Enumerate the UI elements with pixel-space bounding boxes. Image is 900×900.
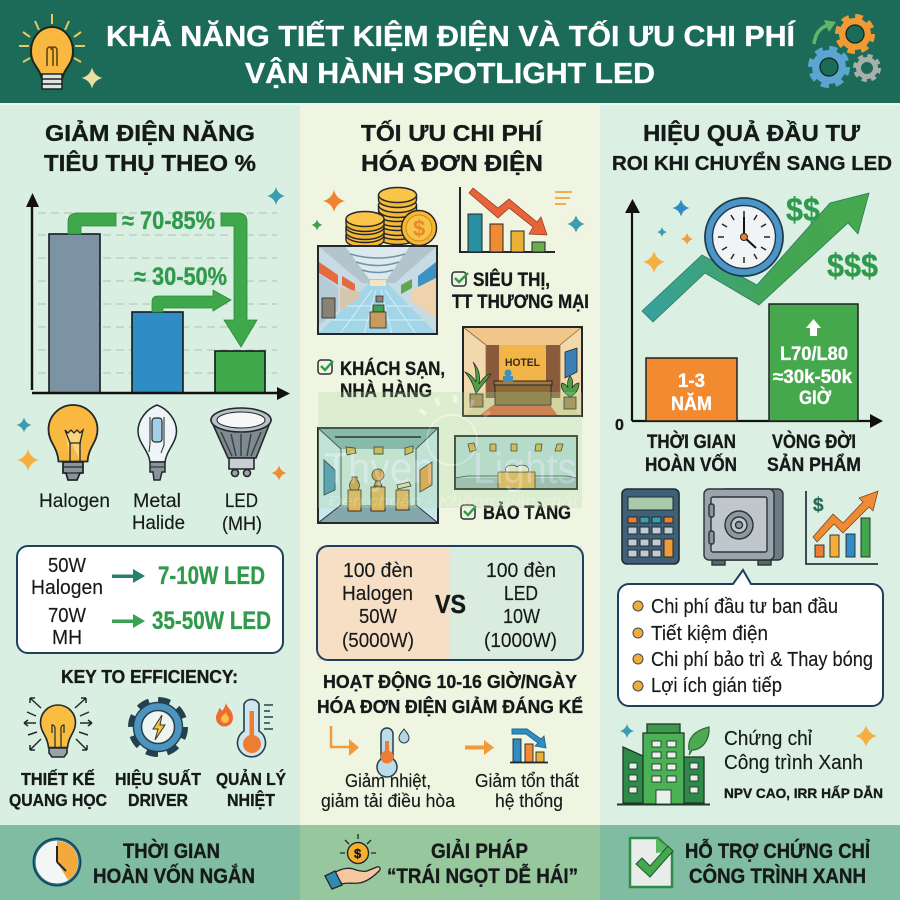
panel: column 3 return on investment — [600, 104, 900, 825]
values: LED wattage — [152, 562, 271, 635]
header banner — [0, 0, 900, 105]
icon: coin stacks — [346, 188, 436, 248]
image: museum hall — [318, 428, 438, 523]
title — [106, 19, 796, 90]
chart: payback and lifetime — [615, 191, 883, 434]
labels: chart categories: VÒNG ĐỜI — [772, 429, 856, 453]
bar: payback: 1-3 — [678, 371, 705, 392]
title: VẬN HÀNH SPOTLIGHT LED — [245, 56, 655, 90]
labels: lamp names: LED — [225, 490, 258, 512]
icon: growth chart — [806, 491, 878, 564]
arrow: metal halide to LED saving — [152, 290, 231, 312]
icon: gears and arrow — [813, 19, 878, 83]
text: halogen group: 50W — [359, 605, 398, 628]
icon: footer clock — [34, 838, 80, 886]
heading: key to efficiency: KEY TO EFFICIENCY: — [61, 667, 238, 687]
label: supermarket: SIÊU THỊ, — [473, 267, 550, 291]
callout: cost factors list — [618, 570, 883, 706]
labels: lamp names — [39, 490, 262, 535]
list text: Chi phí bảo trì & Thay bóng — [651, 649, 873, 671]
image: shopping mall — [318, 246, 437, 334]
text: certificate support: HỖ TRỢ CHỨNG CHỈ — [685, 839, 870, 863]
icon: hand with coin — [325, 834, 380, 889]
labels: efficiency keys: QUANG HỌC — [9, 790, 107, 810]
text: indirect savings captions: giảm tải điều hòa — [321, 791, 456, 811]
labels: efficiency keys: NHIỆT — [227, 789, 275, 810]
panel: column 1 electricity reduction — [0, 104, 300, 825]
callout: wattage equivalents: Halogen — [31, 577, 103, 599]
labels: chart categories: SẢN PHẨM — [767, 453, 861, 476]
text: versus: VS — [435, 589, 466, 619]
icons: dollar signs: $$ — [786, 191, 820, 228]
labels: chart categories: THỜI GIAN — [647, 429, 736, 453]
watermark: Thyen — [324, 444, 434, 493]
icon: driver gear — [134, 702, 182, 752]
bar chart: power by lamp type — [26, 193, 290, 400]
icon: halogen bulb — [48, 405, 98, 480]
labels: efficiency keys: HIỆU SUẤT — [115, 768, 201, 789]
labels: efficiency keys: DRIVER — [128, 790, 188, 810]
label: supermarket — [452, 267, 589, 313]
icon: thermal thermometer with flame — [216, 700, 273, 757]
title: KHẢ NĂNG TIẾT KIỆM ĐIỆN VÀ TỐI ƯU CHI PHÍ — [106, 19, 796, 53]
arrow: MH to LED — [112, 614, 145, 628]
icon: metal halide bulb — [138, 405, 176, 480]
text: green certificate: Chứng chỉ — [724, 728, 813, 750]
icon: light bulb — [19, 14, 102, 89]
label: hotels and restaurants — [318, 357, 445, 402]
labels: efficiency keys — [9, 768, 286, 810]
label: museum: BẢO TÀNG — [483, 501, 571, 524]
footer: easy win — [300, 825, 600, 900]
text: indirect savings captions: hệ thống — [495, 791, 563, 811]
callout: wattage equivalents: MH — [52, 627, 82, 649]
icon: check supermarket — [452, 272, 468, 286]
watermark: Đèn chuẩn - Không gian chất — [328, 493, 579, 510]
heading: optimise bills: HÓA ĐƠN ĐIỆN — [361, 149, 543, 176]
icon: optical design bulb — [24, 698, 92, 757]
values: LED wattage: 35-50W LED — [152, 607, 271, 635]
list text: Tiết kiệm điện — [651, 623, 768, 645]
image: museum display case — [455, 436, 577, 489]
sparkles: column 3 — [620, 200, 877, 747]
icon: hand with coin: $ — [354, 846, 362, 861]
text: halogen group: (5000W) — [342, 629, 414, 652]
labels: efficiency keys: THIẾT KẾ — [21, 768, 95, 789]
text: LED group: (1000W) — [484, 629, 557, 652]
text: halogen group: Halogen — [342, 582, 413, 605]
panel: column 2 bill optimisation — [300, 104, 600, 825]
callout: wattage equivalents: 70W — [48, 605, 86, 627]
icon: coin dollar sign: $ — [413, 216, 425, 241]
text: LED group: 10W — [503, 605, 541, 628]
labels: chart categories: HOÀN VỐN — [645, 452, 737, 476]
text: operating hours note: HOẠT ĐỘNG 10-16 GIỜ/NGÀY — [323, 671, 578, 692]
text: easy win: GIẢI PHÁP — [431, 840, 528, 863]
text: short payback: HOÀN VỐN NGẮN — [93, 864, 255, 888]
text: easy win: “TRÁI NGỌT DỄ HÁI” — [387, 865, 578, 888]
text: operating hours note: HÓA ĐƠN ĐIỆN GIẢM ĐÁNG KỂ — [317, 696, 583, 717]
labels: efficiency keys: QUẢN LÝ — [216, 768, 286, 789]
sparkles: column 2 — [312, 190, 585, 233]
icons: dollar signs — [786, 191, 878, 284]
text: green certificate: Công trình Xanh — [724, 752, 863, 774]
text: indirect savings captions: Giảm nhiệt, — [345, 771, 431, 791]
list text — [651, 596, 873, 697]
heading: optimise bills: TỐI ƯU CHI PHÍ — [361, 119, 543, 146]
icon: thermometer and droplet — [377, 728, 409, 777]
icon: check museum — [461, 505, 476, 519]
bar: product lifetime: ≈30k-50k — [773, 367, 852, 388]
text: indirect savings captions: Giảm tổn thất — [475, 771, 579, 791]
icon: calculator — [622, 489, 679, 564]
label: supermarket: TT THƯƠNG MẠI — [452, 291, 589, 313]
arrow: halogen to LED — [112, 569, 145, 583]
text: green certificate: NPV CAO, IRR HẤP DẪN — [724, 785, 883, 801]
text: green certificate — [724, 728, 883, 801]
bar: product lifetime: L70/L80 — [780, 344, 848, 365]
text: LED group: 100 đèn — [486, 559, 556, 582]
icon: certificate document — [630, 838, 673, 887]
labels: lamp names: Halogen — [39, 490, 110, 512]
sparkles: column 1 top — [16, 187, 286, 480]
heading: ROI: ROI KHI CHUYỂN SANG LED — [612, 152, 892, 175]
label: axis zero: 0 — [615, 417, 624, 434]
text: short payback — [93, 839, 255, 888]
label: museum — [461, 501, 571, 524]
values: LED wattage: 7-10W LED — [158, 562, 265, 590]
icon: LED spotlight — [211, 408, 271, 476]
watermark — [318, 392, 582, 510]
arrowhead: heat reduction — [349, 739, 359, 756]
footer: payback — [0, 825, 300, 900]
bar: payback — [646, 358, 737, 421]
heading: reduce consumption: GIẢM ĐIỆN NĂNG — [45, 118, 255, 146]
text: LED group: LED — [504, 582, 538, 605]
image: hotel lobby — [463, 327, 582, 416]
icon: system loss chart — [510, 729, 548, 762]
heading: ROI — [612, 118, 892, 175]
text: certificate support: CÔNG TRÌNH XANH — [689, 864, 866, 888]
footer: green certificate support — [600, 825, 900, 900]
list text: Lợi ích gián tiếp — [651, 675, 782, 697]
heading: reduce consumption — [44, 118, 256, 176]
text: indirect savings captions — [321, 771, 579, 811]
labels: lamp names: Halide — [132, 512, 185, 534]
bar: product lifetime: GIỜ — [799, 387, 832, 409]
icon: green building — [617, 724, 710, 804]
text: LED group — [484, 559, 557, 652]
heading: optimise bills — [361, 119, 543, 176]
text: certificate support — [685, 839, 870, 888]
text: halogen group — [342, 559, 414, 652]
text: operating hours note — [317, 671, 583, 717]
icon: check hotel — [318, 360, 333, 374]
icon: growth chart: $ — [813, 495, 824, 516]
text: easy win — [387, 840, 578, 888]
label: hotels and restaurants: KHÁCH SẠN, — [340, 357, 445, 380]
label: hotels and restaurants: NHÀ HÀNG — [340, 379, 432, 402]
heading: ROI: HIỆU QUẢ ĐẦU TƯ — [643, 118, 861, 146]
comparison: halogen vs LED — [317, 546, 583, 660]
label: 70-85 percent: ≈ 70-85% — [122, 207, 215, 235]
labels: chart categories — [645, 429, 861, 476]
label: 30-50 percent: ≈ 30-50% — [134, 263, 227, 291]
text: halogen group: 100 đèn — [343, 559, 413, 582]
icons: dollar signs: $$$ — [827, 247, 878, 284]
arrow: to heat reduction — [331, 726, 350, 747]
label: hotel sign: HOTEL — [505, 357, 540, 369]
heading: reduce consumption: TIÊU THỤ THEO % — [44, 149, 256, 176]
icon: clock — [705, 198, 783, 276]
arrow: halogen to LED saving — [68, 213, 257, 347]
chart: falling bills — [460, 187, 555, 252]
arrow: to system loss — [465, 740, 494, 755]
list text: Chi phí đầu tư ban đầu — [651, 596, 838, 618]
bullets — [633, 601, 643, 691]
watermark: Lights — [473, 444, 577, 493]
bar: product lifetime — [769, 304, 858, 421]
icon: safe — [704, 489, 783, 565]
labels: lamp names: Metal — [133, 490, 181, 512]
labels: lamp names: (MH) — [222, 513, 262, 535]
callout: wattage equivalents: 50W — [48, 555, 86, 577]
bar: payback: NĂM — [671, 393, 712, 415]
text: short payback: THỜI GIAN — [123, 839, 220, 863]
arrow: rising return — [642, 193, 869, 322]
callout: wattage equivalents — [17, 546, 283, 653]
